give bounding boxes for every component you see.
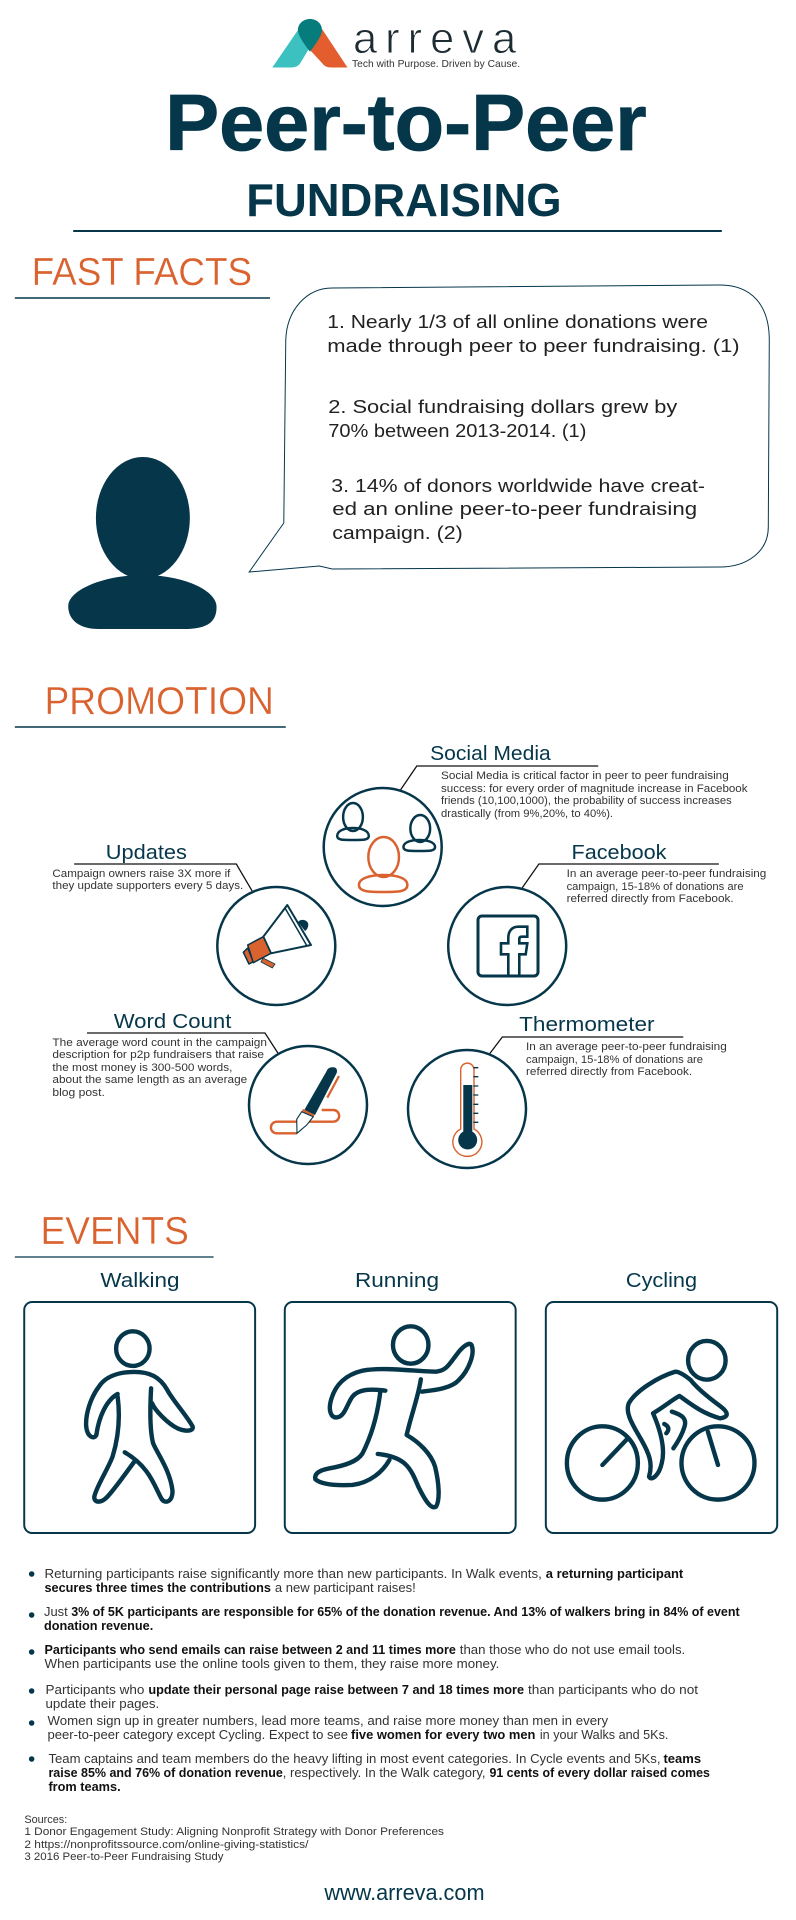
footer url: www.arreva.com: [323, 1880, 485, 1905]
bullet list: key points: Participants who: [45, 1683, 144, 1697]
bullet list: key points: a returning participant: [546, 1567, 683, 1581]
bullet list: key points: five women for every two men: [351, 1728, 535, 1742]
bullet list: key points: a new participant raises!: [275, 1581, 416, 1595]
icon: thermometer: [408, 1050, 526, 1168]
sources: Sources:: [24, 1814, 67, 1826]
icon: facebook: [448, 887, 566, 1005]
icon: social media people: [324, 788, 442, 906]
bullet list: key points: than participants who do not: [528, 1683, 699, 1697]
item: updates: [52, 842, 252, 892]
item: word count: Word Count: [114, 1011, 232, 1033]
icon: megaphone: [217, 887, 335, 1005]
sources: 2 https://nonprofitssource.com/online-giving-statistics/: [24, 1839, 310, 1851]
item: social media: Social Media is critical factor in peer to peer fundraising: [441, 770, 729, 782]
speech bubble: fast facts: 1. Nearly 1/3 of all online donations were: [327, 311, 708, 332]
bullet list: key points: from teams.: [48, 1780, 121, 1794]
bullet list: key points: Participants who send emails can raise between 2 and 11 times more: [44, 1643, 456, 1657]
item: updates: Campaign owners raise 3X more if: [52, 868, 231, 880]
title: Peer-to-Peer: [165, 78, 647, 167]
item: updates: they update supporters every 5 days.: [52, 880, 243, 892]
bullet list: key points: 91 cents of every dollar raised comes: [489, 1766, 710, 1780]
item: thermometer: [489, 1014, 727, 1078]
panel: cycling: [546, 1302, 777, 1533]
logo: arreva: [272, 14, 520, 70]
bullet list: key points: peer-to-peer category except Cycling. Expect to see: [47, 1728, 348, 1742]
logo: arreva: Tech with Purpose. Driven by Cause.: [352, 59, 520, 70]
item: social media: drastically (from 9%,20%, to 40%).: [441, 808, 613, 820]
item: social media: [400, 743, 748, 820]
panel: running: [285, 1302, 516, 1533]
heading: fast facts: FAST FACTS: [32, 251, 252, 294]
speech bubble: fast facts: campaign. (2): [332, 522, 463, 543]
subtitle: FUNDRAISING: [246, 174, 562, 226]
label: running: Running: [355, 1270, 439, 1292]
bullet list: key points: update their personal page raise between 7 and 18 times more: [148, 1683, 524, 1697]
bullet list: key points: than those who do not use email tools.: [460, 1643, 685, 1657]
item: facebook: In an average peer-to-peer fundraising: [567, 868, 766, 880]
sources: [24, 1814, 445, 1863]
item: social media: friends (10,100,1000), the probability of success increases: [441, 795, 732, 807]
speech bubble: fast facts: 3. 14% of donors worldwide have creat-: [331, 475, 705, 496]
item: word count: [52, 1011, 278, 1099]
item: facebook: referred directly from Facebook.: [567, 893, 734, 905]
icon: person silhouette: [68, 457, 217, 629]
bullet list: key points: teams: [663, 1752, 701, 1766]
speech bubble: fast facts: made through peer to peer fundraising. (1): [327, 335, 740, 356]
bullet list: key points: 3% of 5K participants are responsible for 65% of the donation revenue. And 13% of walkers bring in 84% of event: [71, 1605, 740, 1619]
item: thermometer: referred directly from Facebook.: [526, 1066, 692, 1078]
item: word count: the most money is 300-500 words,: [52, 1062, 232, 1074]
item: word count: blog post.: [52, 1087, 105, 1099]
bullet list: key points: Returning participants raise significantly more than new participants. In Walk events,: [44, 1567, 542, 1581]
item: social media: success: for every order of magnitude increase in Facebook: [441, 783, 748, 795]
bullet list: key points: , respectively. In the Walk category,: [283, 1766, 486, 1780]
item: word count: description for p2p fundraisers that raise: [52, 1049, 264, 1061]
item: facebook: Facebook: [572, 842, 667, 864]
bullet list: key points: raise 85% and 76% of donation revenue: [48, 1766, 283, 1780]
speech bubble: fast facts: ed an online peer-to-peer fundraising: [332, 498, 697, 519]
bullet list: key points: secures three times the contributions: [44, 1581, 271, 1595]
sources: 3 2016 Peer-to-Peer Fundraising Study: [24, 1851, 224, 1863]
item: thermometer: In an average peer-to-peer fundraising: [526, 1041, 727, 1053]
logo: arreva: arreva: [353, 14, 517, 63]
label: walking: Walking: [100, 1270, 179, 1292]
panel: walking: [24, 1302, 255, 1533]
item: word count: about the same length as an average: [52, 1074, 247, 1086]
sources: 1 Donor Engagement Study: Aligning Nonprofit Strategy with Donor Preferences: [24, 1826, 445, 1838]
item: facebook: [522, 842, 766, 905]
item: thermometer: Thermometer: [519, 1014, 655, 1036]
label: cycling: Cycling: [626, 1270, 697, 1292]
item: thermometer: campaign, 15-18% of donations are: [526, 1054, 703, 1066]
bullet list: key points: Team captains and team members do the heavy lifting in most event categories. In Cycle events and 5Ks,: [48, 1752, 661, 1766]
speech bubble: fast facts: 70% between 2013-2014. (1): [328, 420, 586, 441]
item: word count: The average word count in the campaign: [52, 1037, 267, 1049]
heading: events: EVENTS: [41, 1210, 189, 1253]
bullet list: key points: Women sign up in greater numbers, lead more teams, and raise more money than men in every: [47, 1714, 609, 1728]
icon: pen: [249, 1046, 367, 1164]
bullet list: key points: [29, 1567, 740, 1794]
item: updates: Updates: [106, 842, 187, 864]
bullet list: key points: When participants use the online tools given to them, they raise more money.: [44, 1657, 499, 1671]
item: facebook: campaign, 15-18% of donations are: [567, 881, 744, 893]
item: social media: Social Media: [430, 743, 552, 765]
heading: promotion: PROMOTION: [44, 680, 274, 723]
speech bubble: fast facts: 2. Social fundraising dollars grew by: [328, 396, 678, 417]
bullet list: key points: donation revenue.: [44, 1619, 153, 1633]
bullet list: key points: in your Walks and 5Ks.: [540, 1728, 668, 1742]
speech bubble: fast facts: [249, 285, 769, 572]
bullet list: key points: update their pages.: [45, 1697, 159, 1711]
bullet list: key points: Just: [44, 1605, 68, 1619]
